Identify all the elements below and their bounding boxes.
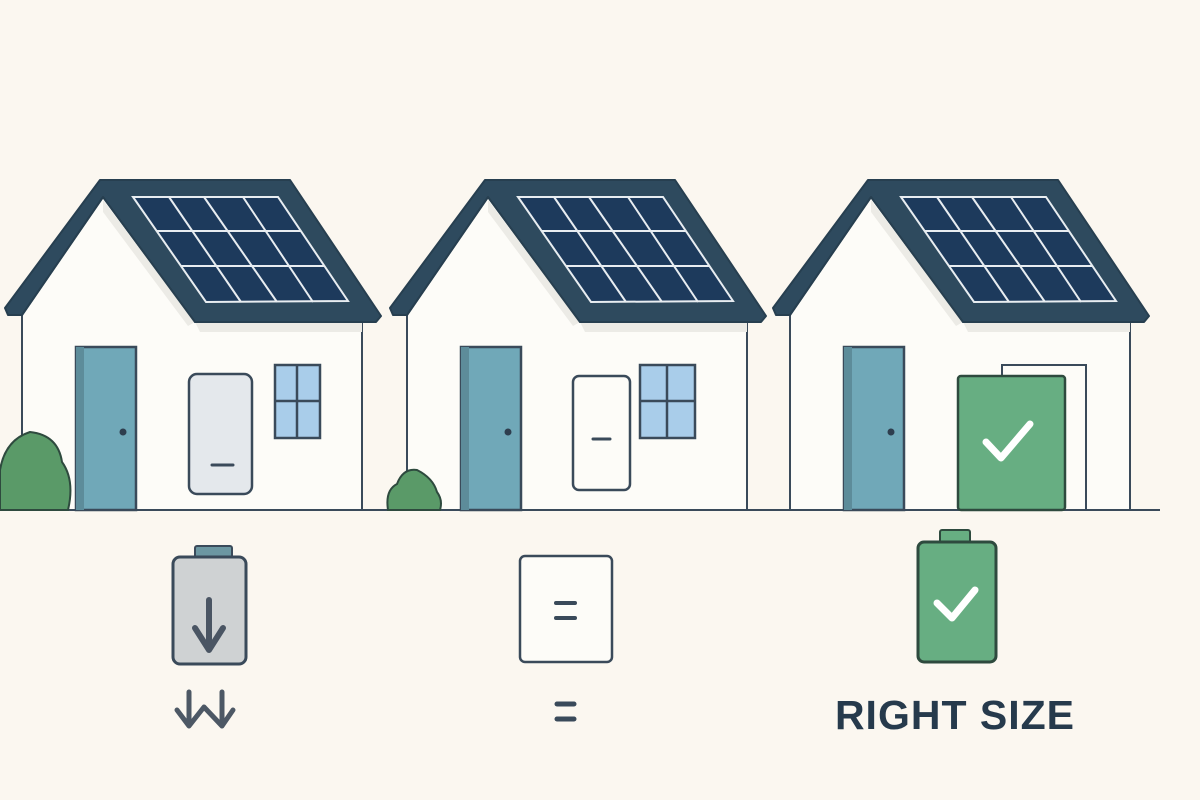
symbol: equals <box>557 704 574 719</box>
house 2: oversized battery <box>387 180 766 510</box>
icon: equal battery <box>520 556 612 662</box>
icon: battery low <box>173 546 246 664</box>
house 3: right-size battery <box>773 180 1149 510</box>
ground line <box>0 509 1160 511</box>
icon: green battery with check <box>918 530 996 662</box>
bush 2 <box>387 470 441 510</box>
house 1: undersized battery <box>0 180 381 510</box>
green battery with check <box>958 376 1065 510</box>
window 2 <box>640 365 695 438</box>
wall battery 2 <box>573 376 630 490</box>
symbol: double down arrow <box>177 692 233 726</box>
wall battery 1 <box>189 374 252 494</box>
bush 1 <box>0 432 70 510</box>
rear battery outline <box>1002 365 1086 510</box>
label: right size: RIGHT SIZE <box>835 692 1075 738</box>
window 1 <box>275 365 320 438</box>
